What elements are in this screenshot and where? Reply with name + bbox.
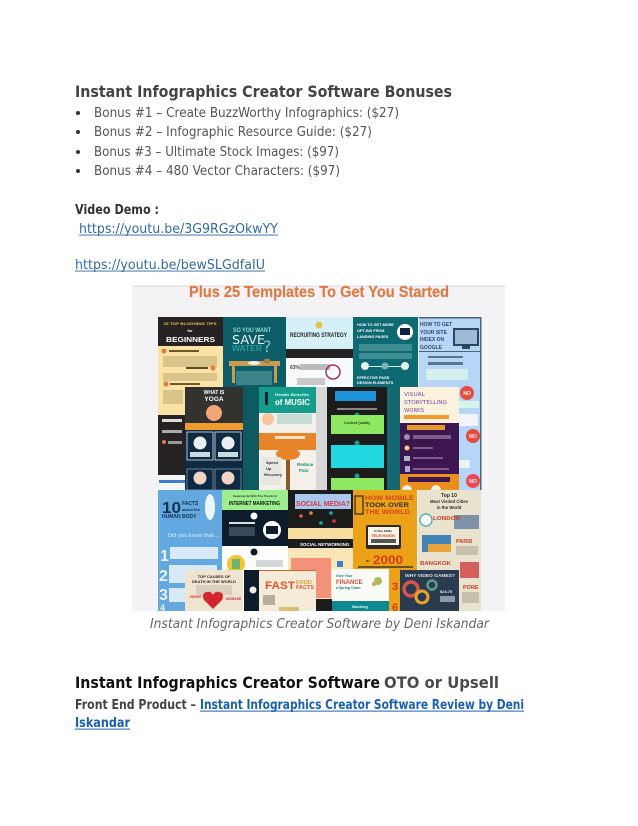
card: save water: ? (263, 337, 272, 356)
card: top causes of death: HEART (190, 595, 203, 599)
card: give your finance: FINANCE (336, 580, 363, 586)
card: how mobile took over (353, 490, 417, 614)
card: landing pages: HOW TO GET MORE (357, 323, 394, 327)
card: health benefits of music: Up (266, 466, 272, 471)
card: blogging tips: BEGINNERS (166, 337, 215, 344)
card: site index on google: INDEX ON (420, 337, 445, 343)
card: internet marketing: Keeping Up With The Trends In (233, 494, 277, 498)
card: 10 facts human body: 2 (159, 568, 168, 585)
card: recruiting strategy: RECRUITING STRATEGY (290, 332, 347, 339)
card: site index on google: NO (463, 391, 471, 397)
card: how mobile took over: 3 (392, 581, 398, 593)
bonus 2: Bonus #2 – Infographic Resource Guide: ($27) (94, 125, 372, 140)
heading: oto or upsell: OTO or Upsell (384, 673, 499, 692)
card: site index on google (419, 317, 482, 490)
card: top causes of death: DEATH IN THE WORLD (192, 579, 236, 584)
card: how mobile took over: 6 (392, 602, 398, 614)
card: how mobile took over: In (366, 558, 370, 563)
card: content marketing: Content Quality (344, 421, 370, 425)
card: content marketing (327, 387, 387, 490)
card: 10 facts human body: 1 (160, 548, 169, 565)
card: give your finance: Banking (352, 604, 368, 609)
video demo label: Video Demo : (75, 203, 159, 218)
card: fast food facts (259, 570, 316, 611)
card: site index on google: HOW TO GET (420, 322, 452, 328)
card: site index on google: NO (469, 434, 477, 440)
card: why video games (400, 570, 459, 611)
card: recruiting strategy: 63% (290, 365, 301, 371)
video link 1: https://youtu.be/3G9RGzOkwYY (79, 222, 278, 237)
bonus 1: Bonus #1 – Create BuzzWorthy Infographics: ($27) (94, 106, 399, 121)
card: most visited cities: LONDON (433, 516, 460, 522)
card: 10 facts human body: 3 (159, 587, 168, 604)
card: landing pages: LANDING PAGES (357, 335, 389, 339)
heading: bonuses: Instant Infographics Creator Software Bonuses (75, 82, 452, 101)
card: save water: WATER (232, 344, 262, 353)
card: 10 facts human body: 10 (162, 500, 181, 517)
card: site index on google: GOOGLE (420, 345, 443, 351)
card: 10 facts human body: HUMAN BODY (162, 514, 197, 520)
card: most visited cities: in the World (437, 505, 462, 510)
card: fast food facts: FACTS (296, 585, 314, 591)
card: why video games: $24.75 (440, 589, 453, 594)
card: how mobile took over: TOOK OVER (365, 502, 409, 509)
card: visual storytelling: VISUAL (404, 392, 426, 398)
card: social media (288, 490, 353, 611)
bonus list (76, 106, 399, 179)
card: most visited cities: BANGKOK (420, 561, 451, 567)
card: health benefits of music: Reduce (297, 462, 314, 467)
card: health benefits of music: Pain (299, 468, 309, 473)
card: 10 facts human body: FACTS (182, 501, 199, 507)
card: give your finance: a Spring Clean (336, 586, 361, 590)
review link: Iskandar (75, 716, 130, 731)
card: most visited cities: PORE (463, 585, 479, 591)
card: social media: SOCIAL NETWORKING (300, 542, 350, 547)
card: visual storytelling (400, 387, 459, 495)
video link 2: https://youtu.be/bewSLGdfaIU (75, 258, 265, 273)
card: site index on google: YOUR SITE (420, 330, 448, 336)
card strip: teal behind content (387, 387, 400, 490)
front end product line: Front End Product – (75, 698, 196, 713)
card: give your finance (332, 569, 389, 611)
card: save water (223, 317, 286, 490)
card: social media: SOCIAL MEDIA? (296, 501, 350, 508)
card: health benefits of music: Health Benefits (275, 392, 310, 397)
card: health benefits of music: of MUSIC (275, 398, 310, 407)
card: site index on google: NO (469, 479, 477, 485)
card strip: grey report (316, 387, 327, 490)
card: what is yoga: YOGA (204, 396, 224, 403)
card: how mobile took over: HOW MOBILE (365, 495, 415, 502)
card: most visited cities: Top 10 (441, 493, 457, 499)
card: internet marketing (222, 490, 288, 611)
card: blogging tips: 10 TOP BLOGGING TIPS (164, 321, 217, 326)
review link: Instant Infographics Creator Software Review by Deni (200, 698, 524, 713)
card: how mobile took over: TELEVISION (371, 533, 395, 538)
card: blogging tips: for (187, 328, 193, 333)
card: landing pages: OPT-INS FROM (357, 329, 384, 333)
review link (75, 698, 524, 731)
card: blogging tips (158, 317, 223, 490)
card: 10 facts human body: about the (182, 507, 201, 512)
card: top causes of death (185, 570, 243, 611)
card: save water: SAVE (232, 333, 265, 347)
bonus 4: Bonus #4 – 480 Vector Characters: ($97) (94, 164, 340, 179)
card: save water: SO YOU WANT (233, 328, 271, 334)
card: health benefits of music (259, 387, 316, 490)
card: recruiting strategy (286, 317, 353, 490)
card: most visited cities: Most Visited Cities (430, 499, 469, 504)
card: give your finance: Give Your (336, 574, 353, 578)
collage title: Plus 25 Templates To Get You Started (189, 284, 449, 301)
card: health benefits of music: Recovery (264, 472, 283, 477)
image caption: Instant Infographics Creator Software by Deni Iskandar (150, 616, 490, 632)
card: 10 facts human body: Did you know that... (168, 533, 219, 539)
card strip: teal behind yoga (243, 387, 259, 490)
card: health benefits of music: Speed (266, 460, 279, 465)
card: visual storytelling: STORYTELLING (404, 400, 447, 406)
card: how mobile took over: THE WORLD (365, 509, 410, 516)
card: landing pages (353, 317, 418, 490)
card: landing pages: DESIGN ELEMENTS (357, 381, 394, 385)
card: internet marketing: INTERNET MARKETING (229, 501, 280, 507)
card: why video games: WHY VIDEO GAMES? (405, 573, 455, 578)
card: landing pages: EFFECTIVE PAGE (357, 376, 390, 380)
card: 10 facts human body: 4 (160, 603, 165, 613)
card: what is yoga (185, 387, 243, 490)
card: top causes of death: TOP CAUSES OF (198, 574, 231, 579)
card: most visited cities (418, 490, 481, 611)
image: templates collage (132, 284, 505, 614)
front end product line (75, 698, 524, 731)
card: most visited cities: PARIS (456, 539, 473, 545)
card: how mobile took over: In The 1930s (374, 529, 392, 533)
card: 10 facts human body (158, 490, 222, 613)
card: fast food facts: FOOD (296, 580, 312, 586)
card: top causes of death: DISEASE (226, 597, 242, 601)
card: fast food facts: FAST (265, 580, 295, 592)
card: what is yoga: WHAT IS (204, 390, 225, 396)
bonus 3: Bonus #3 – Ultimate Stock Images: ($97) (94, 145, 339, 160)
card: visual storytelling: WORKS (404, 408, 424, 414)
heading: oto or upsell: Instant Infographics Creator Software (75, 673, 380, 692)
card: how mobile took over: 2000 (373, 553, 403, 567)
